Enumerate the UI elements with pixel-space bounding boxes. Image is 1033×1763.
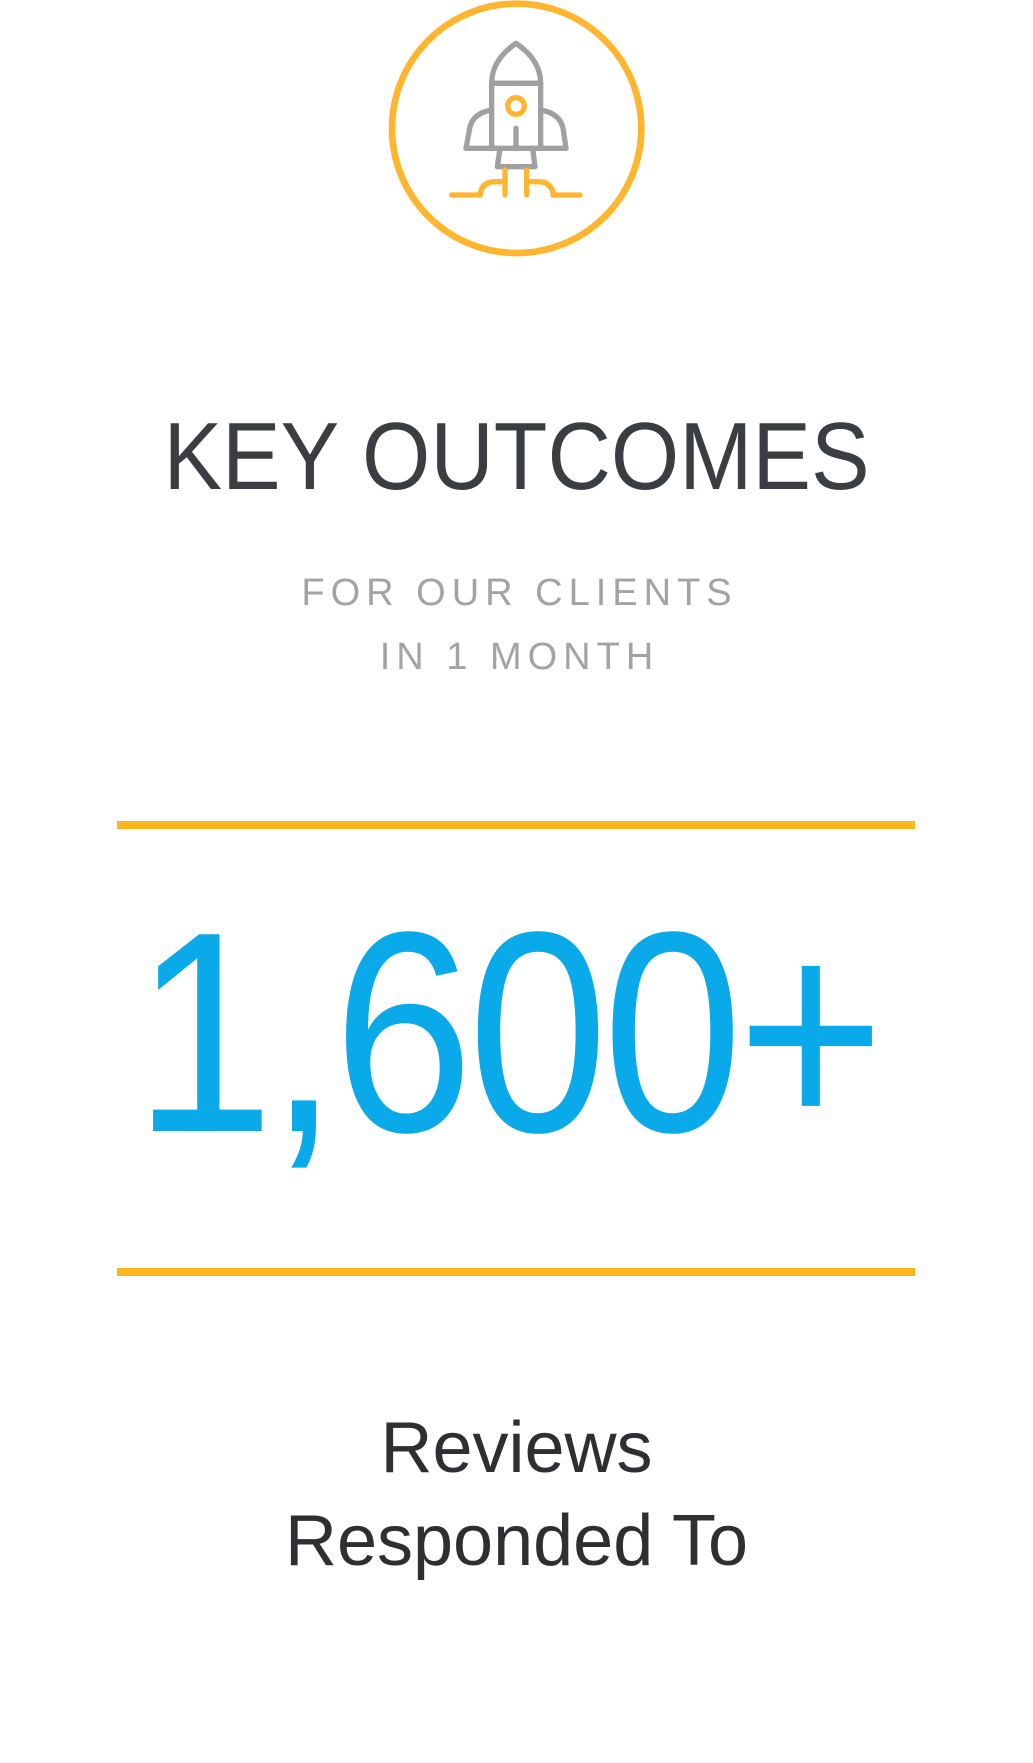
subtitle: IN 1 MONTH: [380, 636, 659, 678]
big number: 1,600+: [134, 872, 879, 1192]
icon: rocket in circle: [388, 0, 645, 256]
bottom divider: [117, 1268, 915, 1276]
caption: Responded To: [285, 1501, 748, 1581]
subtitle: FOR OUR CLIENTS: [301, 572, 738, 614]
caption: [285, 1408, 748, 1581]
caption: Reviews: [380, 1408, 653, 1488]
top divider: [117, 821, 915, 829]
subtitle: [301, 572, 738, 678]
title: KEY OUTCOMES: [163, 403, 870, 510]
